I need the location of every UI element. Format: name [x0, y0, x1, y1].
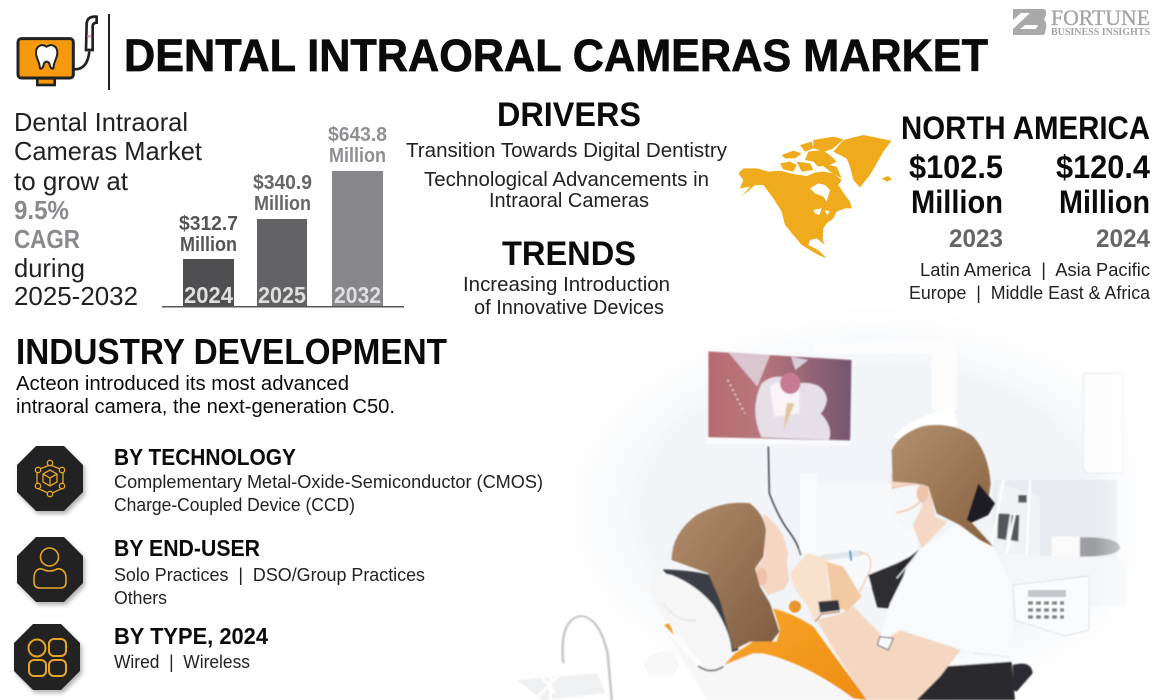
- text block: market growth CAGR: 2025-2032: [14, 281, 138, 311]
- logo: Fortune Business Insights: FORTUNE: [1051, 5, 1150, 30]
- panel: trends: of Innovative Devices: [474, 297, 664, 319]
- panel: by type: [114, 623, 268, 672]
- panel: industry development: [16, 331, 447, 418]
- clinic wall background: [550, 305, 1160, 700]
- dentist arm: [817, 607, 961, 700]
- bar: 2024: Million: [180, 234, 237, 256]
- bar: 2032: [328, 124, 387, 308]
- panel: industry development: Acteon introduced its most advanced: [16, 373, 349, 395]
- patient face: [755, 513, 789, 595]
- panel: North America figures: Europe | Middle East & Africa: [909, 283, 1151, 303]
- camera handpiece: [823, 553, 860, 558]
- panel: drivers: Intraoral Cameras: [489, 190, 649, 212]
- dentist uniform: [878, 525, 1013, 668]
- panel: by end-user: Others: [114, 588, 167, 608]
- text block: market growth CAGR: Dental Intraoral: [14, 107, 188, 137]
- control panel with keypad: [1013, 576, 1089, 636]
- bar: 2032: Million: [329, 145, 386, 167]
- panel: North America figures: $102.5: [909, 149, 1003, 185]
- dentist head: [889, 425, 995, 548]
- panel: trends: TRENDS: [502, 235, 636, 273]
- dentist apron: [913, 662, 1015, 700]
- panel: drivers: [406, 96, 727, 212]
- panel: by type: Wired | Wireless: [114, 652, 250, 672]
- bar: 2025: Million: [254, 193, 311, 215]
- dark chair back: [868, 557, 910, 608]
- bar: 2024: [179, 213, 238, 308]
- text block: market growth CAGR: Cameras Market: [14, 136, 203, 166]
- panel: North America figures: 2023: [949, 225, 1003, 253]
- bar: 2025: 2025: [258, 282, 306, 308]
- pillow: [644, 653, 678, 675]
- gloved hands: [827, 562, 862, 612]
- main figures: patient and dentist: [644, 447, 1033, 700]
- text block: market growth CAGR: CAGR: [14, 224, 80, 254]
- dentist collar: [897, 549, 919, 573]
- title: DENTAL INTRAORAL CAMERAS MARKET: [124, 30, 988, 81]
- headrest: [663, 569, 738, 653]
- panel: North America figures: [901, 110, 1151, 303]
- panel: North America figures: $120.4: [1056, 149, 1150, 185]
- edge fade: [1095, 320, 1160, 700]
- bar: 2024: 2024: [184, 282, 233, 308]
- upper wall, ceiling arm and cabinet: [813, 340, 1127, 607]
- icon: monitor with tooth and intraoral camera: [18, 17, 97, 85]
- patient drape: [724, 608, 867, 700]
- logo: Fortune Business Insights: BUSINESS INSIGHTS: [1051, 27, 1150, 38]
- bar: 2025: $340.9: [253, 172, 312, 194]
- text block: market growth CAGR: to grow at: [14, 166, 129, 196]
- text block: market growth CAGR: during: [14, 253, 85, 283]
- text block: market growth CAGR: [14, 107, 203, 311]
- panel: by type: BY TYPE, 2024: [114, 623, 268, 649]
- icon: type grid: [14, 624, 80, 690]
- panel: by technology: [114, 444, 543, 515]
- bar: 2032: $643.8: [328, 124, 387, 146]
- panel: North America figures: Million: [911, 184, 1003, 220]
- map: North America: [738, 135, 892, 258]
- panel: drivers: Transition Towards Digital Dentistry: [406, 140, 727, 162]
- camera cable: [768, 447, 801, 555]
- panel: North America figures: Million: [1059, 184, 1150, 220]
- panel: industry development: intraoral camera, the next-generation C50.: [16, 396, 395, 418]
- panel: by end-user: Solo Practices | DSO/Group Practices: [114, 565, 425, 585]
- bar chart: market size: [162, 124, 404, 308]
- panel: industry development: INDUSTRY DEVELOPMENT: [16, 331, 447, 372]
- background column and panel: [800, 473, 817, 553]
- chair seat: [663, 627, 857, 700]
- logo: Fortune Business Insights: [1013, 5, 1150, 38]
- panel: trends: [463, 235, 670, 319]
- panel: North America figures: Latin America | Asia Pacific: [920, 260, 1150, 280]
- panel: by end-user: [114, 535, 425, 608]
- icon: end-user person: [17, 537, 83, 602]
- text block: market growth CAGR: 9.5%: [14, 195, 69, 225]
- patient hair: [672, 503, 779, 650]
- panel: by technology: BY TECHNOLOGY: [114, 444, 296, 470]
- panel: drivers: DRIVERS: [497, 96, 641, 134]
- panel: trends: Increasing Introduction: [463, 274, 670, 296]
- title divider: [108, 14, 110, 90]
- sink tap: [517, 616, 612, 700]
- panel: by technology: Complementary Metal-Oxide-Semiconductor (CMOS): [114, 472, 543, 492]
- panel: drivers: Technological Advancements in: [424, 169, 709, 191]
- dentist watch: [818, 600, 840, 613]
- icon: technology cube network: [17, 446, 83, 511]
- panel: North America figures: 2024: [1096, 225, 1150, 253]
- panel: by technology: Charge-Coupled Device (CCD): [114, 495, 355, 515]
- bar: 2024: $312.7: [179, 213, 238, 235]
- panel: by end-user: BY END-USER: [114, 535, 260, 561]
- bar: 2032: 2032: [334, 282, 381, 308]
- monitor with tooth image: [705, 351, 851, 445]
- photo: dentist examining a patient with an intraoral camera: [517, 305, 1160, 700]
- bar: 2025: [253, 172, 312, 308]
